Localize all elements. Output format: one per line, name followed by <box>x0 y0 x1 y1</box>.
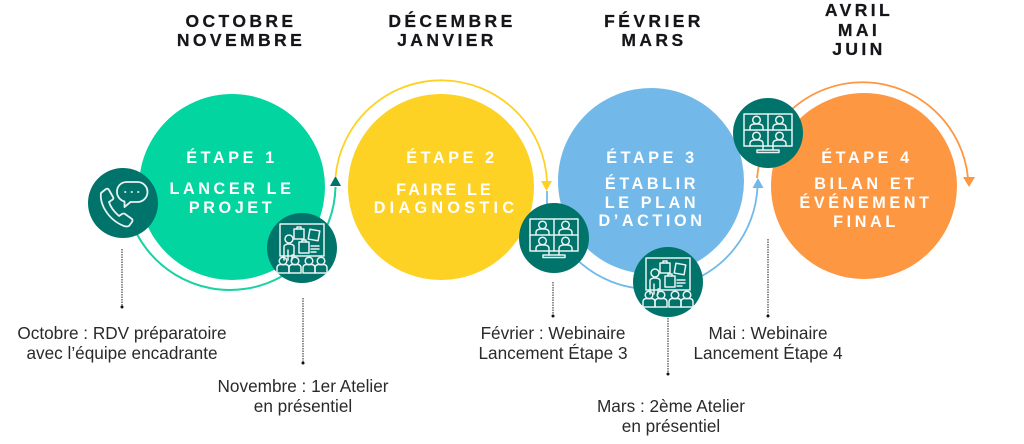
panel: étape 1: ÉTAPE 1 <box>186 148 278 167</box>
panel: étape 3: D’ACTION <box>598 212 706 230</box>
panel: étape 1 <box>139 94 325 280</box>
caption: octobre <box>17 323 227 363</box>
panel: étape 2 <box>348 94 534 280</box>
caption: novembre: Novembre : 1er Atelier <box>218 376 389 396</box>
month heading: février mars: FÉVRIER <box>604 10 704 31</box>
panel: étape 2: FAIRE LE <box>396 181 494 199</box>
leader line: octobre <box>120 249 124 308</box>
leader line: mai <box>766 239 770 318</box>
panel: étape 3: ÉTAPE 3 <box>606 148 698 167</box>
panel: étape 3: ÉTABLIR <box>605 174 699 193</box>
month heading: avril mai juin: MAI <box>838 20 880 40</box>
panel: étape 4 <box>771 93 957 279</box>
caption: novembre <box>218 376 389 416</box>
panel: étape 3 <box>558 88 744 274</box>
caption: octobre: avec l’équipe encadrante <box>26 343 218 363</box>
month heading: décembre janvier: JANVIER <box>397 30 497 50</box>
caption: mai <box>693 323 843 363</box>
caption: février <box>478 323 628 363</box>
leader line: mars <box>666 318 670 376</box>
caption: février: Lancement Étape 3 <box>478 343 628 363</box>
icon: webinar 1 <box>519 203 589 273</box>
icon: workshop 1 <box>267 213 337 283</box>
month heading: octobre novembre: NOVEMBRE <box>177 30 305 50</box>
arc: orange <box>757 82 975 187</box>
panel: étape 1: LANCER LE <box>169 180 295 198</box>
caption: mars <box>597 396 745 436</box>
panel: étape 3: LE PLAN <box>605 194 699 212</box>
month heading: décembre janvier: DÉCEMBRE <box>388 10 516 31</box>
caption: mai: Lancement Étape 4 <box>693 343 843 363</box>
caption: mars: en présentiel <box>622 416 720 436</box>
icon: webinar 2 <box>733 98 803 168</box>
arc: yellow <box>336 80 552 191</box>
leader line: novembre <box>302 298 304 364</box>
caption: novembre: en présentiel <box>254 396 352 416</box>
arc: green <box>130 176 341 290</box>
caption: octobre: Octobre : RDV préparatoire <box>17 323 227 343</box>
caption: mars: Mars : 2ème Atelier <box>597 396 745 416</box>
panel: étape 4: ÉVÉNEMENT <box>799 193 933 212</box>
panel: étape 4: FINAL <box>833 213 899 231</box>
caption: février: Février : Webinaire <box>481 323 625 343</box>
panel: étape 1: PROJET <box>189 199 275 217</box>
month heading: avril mai juin <box>825 0 893 59</box>
panel: étape 4: ÉTAPE 4 <box>821 148 913 167</box>
arc: blue <box>547 178 764 289</box>
icon: workshop 2 <box>633 247 703 317</box>
month heading: décembre janvier <box>388 10 516 50</box>
panel: étape 4: BILAN ET <box>814 175 918 193</box>
panel: étape 2: DIAGNOSTIC <box>374 199 518 217</box>
month heading: octobre novembre <box>177 11 305 50</box>
panel: étape 2: ÉTAPE 2 <box>406 148 498 167</box>
icon: phone <box>88 168 158 238</box>
month heading: avril mai juin: AVRIL <box>825 0 893 20</box>
leader line: février <box>552 282 554 318</box>
month heading: octobre novembre: OCTOBRE <box>186 11 296 31</box>
month heading: février mars <box>604 10 704 50</box>
month heading: février mars: MARS <box>621 30 687 50</box>
month heading: avril mai juin: JUIN <box>832 39 886 59</box>
caption: mai: Mai : Webinaire <box>708 323 828 343</box>
